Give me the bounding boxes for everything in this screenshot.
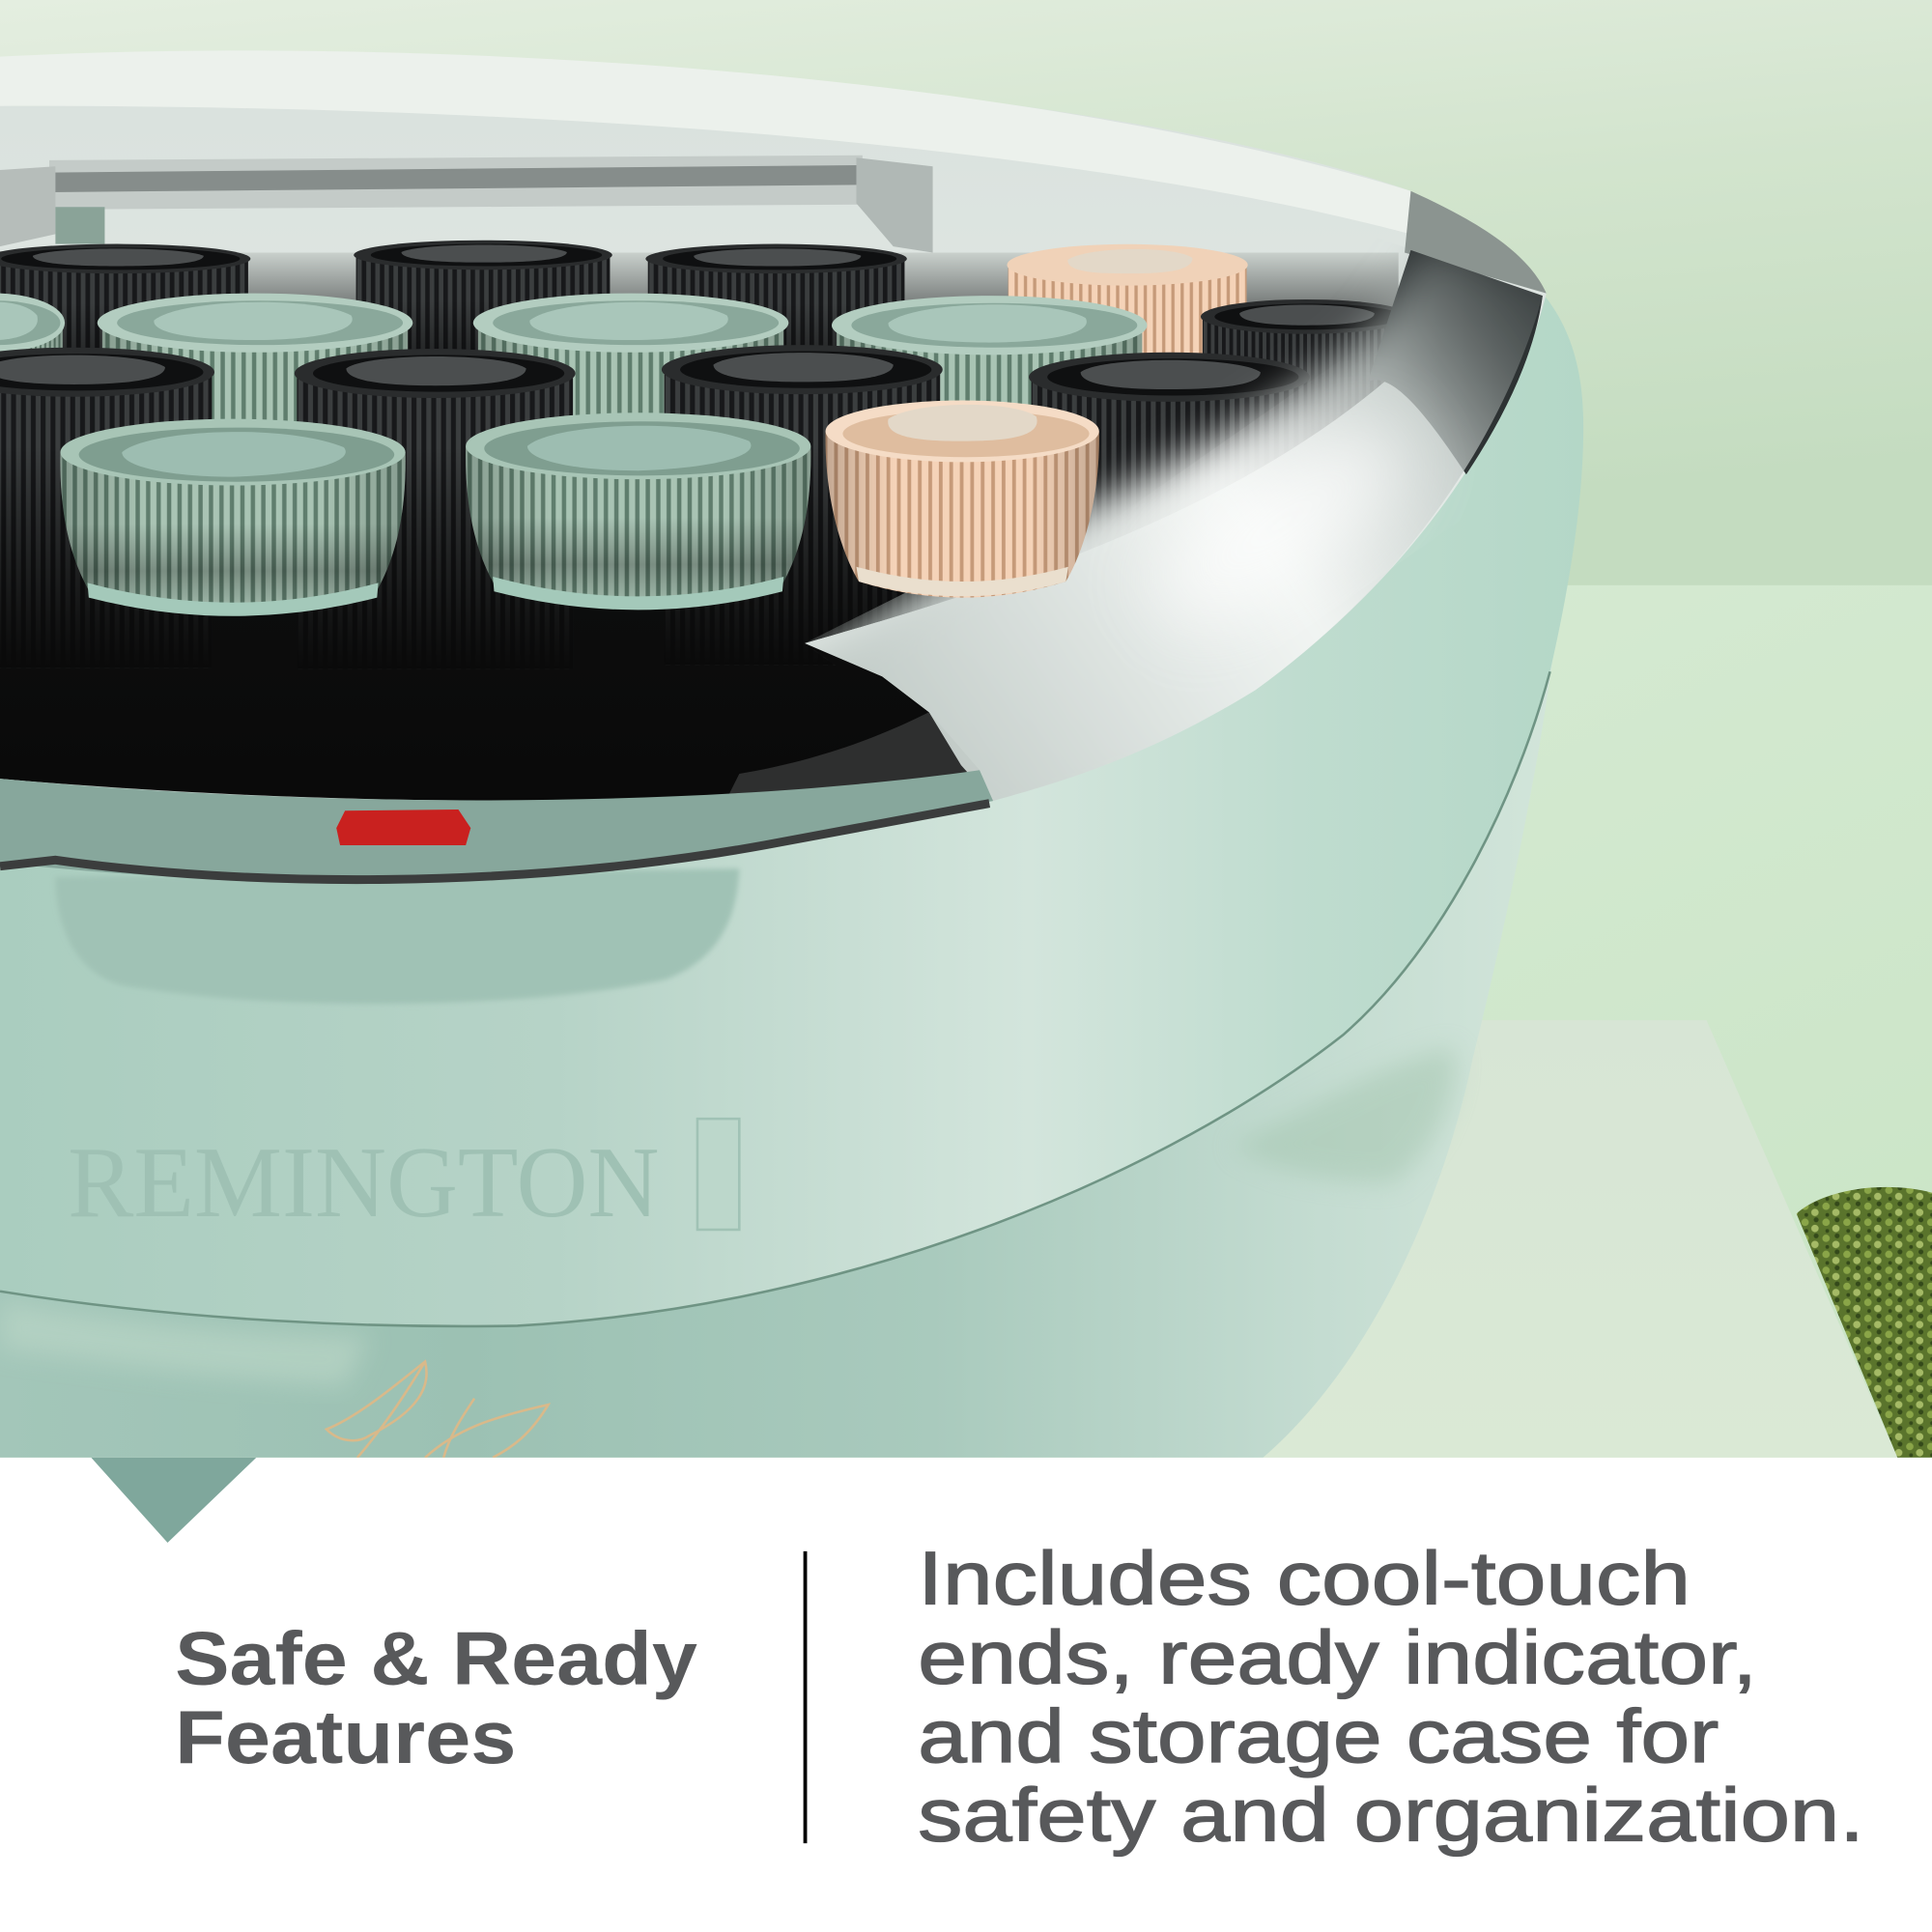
moss plant [1797, 1187, 1932, 1458]
heading [175, 1618, 697, 1779]
lower band reflection [0, 1300, 370, 1386]
pointer triangle [91, 1458, 256, 1543]
frosted lid edge [805, 250, 1542, 801]
white caption panel [0, 1458, 1932, 1932]
seam highlight [0, 671, 1550, 1326]
rollers, back row [0, 241, 1411, 524]
top frosted band of the lid [0, 50, 1410, 234]
heading: Features [175, 1696, 516, 1779]
hand recess [55, 868, 739, 1004]
description text: safety and organization. [918, 1775, 1864, 1858]
description text: Includes cool-touch [918, 1538, 1690, 1621]
dark corner of lid [1405, 191, 1547, 294]
heading: Safe & Ready [175, 1618, 697, 1701]
reflection of plant [1233, 1047, 1455, 1182]
description text: and storage case for [918, 1695, 1719, 1778]
textured deck edge [727, 712, 980, 799]
chrome handle [0, 156, 933, 252]
rollers, black middle row [0, 345, 1310, 672]
black lid edge [0, 804, 989, 880]
white plinth [1208, 1020, 1897, 1458]
divider [804, 1551, 807, 1843]
rollers, front row [60, 401, 1099, 616]
clear lid glass [0, 62, 1547, 845]
upper body [0, 294, 1583, 1326]
rollers, green middle row [0, 294, 1147, 473]
brand emboss: REMINGTON [68, 1126, 659, 1238]
lower body [0, 640, 1555, 1458]
background wall and table [0, 0, 1932, 1458]
description text: ends, ready indicator, [918, 1616, 1757, 1699]
gold leaf decoration [327, 1361, 549, 1458]
frost highlight [1128, 393, 1435, 654]
front rim [0, 770, 993, 881]
ready indicator light [336, 810, 470, 845]
dark interior deck [0, 252, 1399, 801]
hair roller case [0, 50, 1589, 1458]
description text [918, 1538, 1864, 1858]
